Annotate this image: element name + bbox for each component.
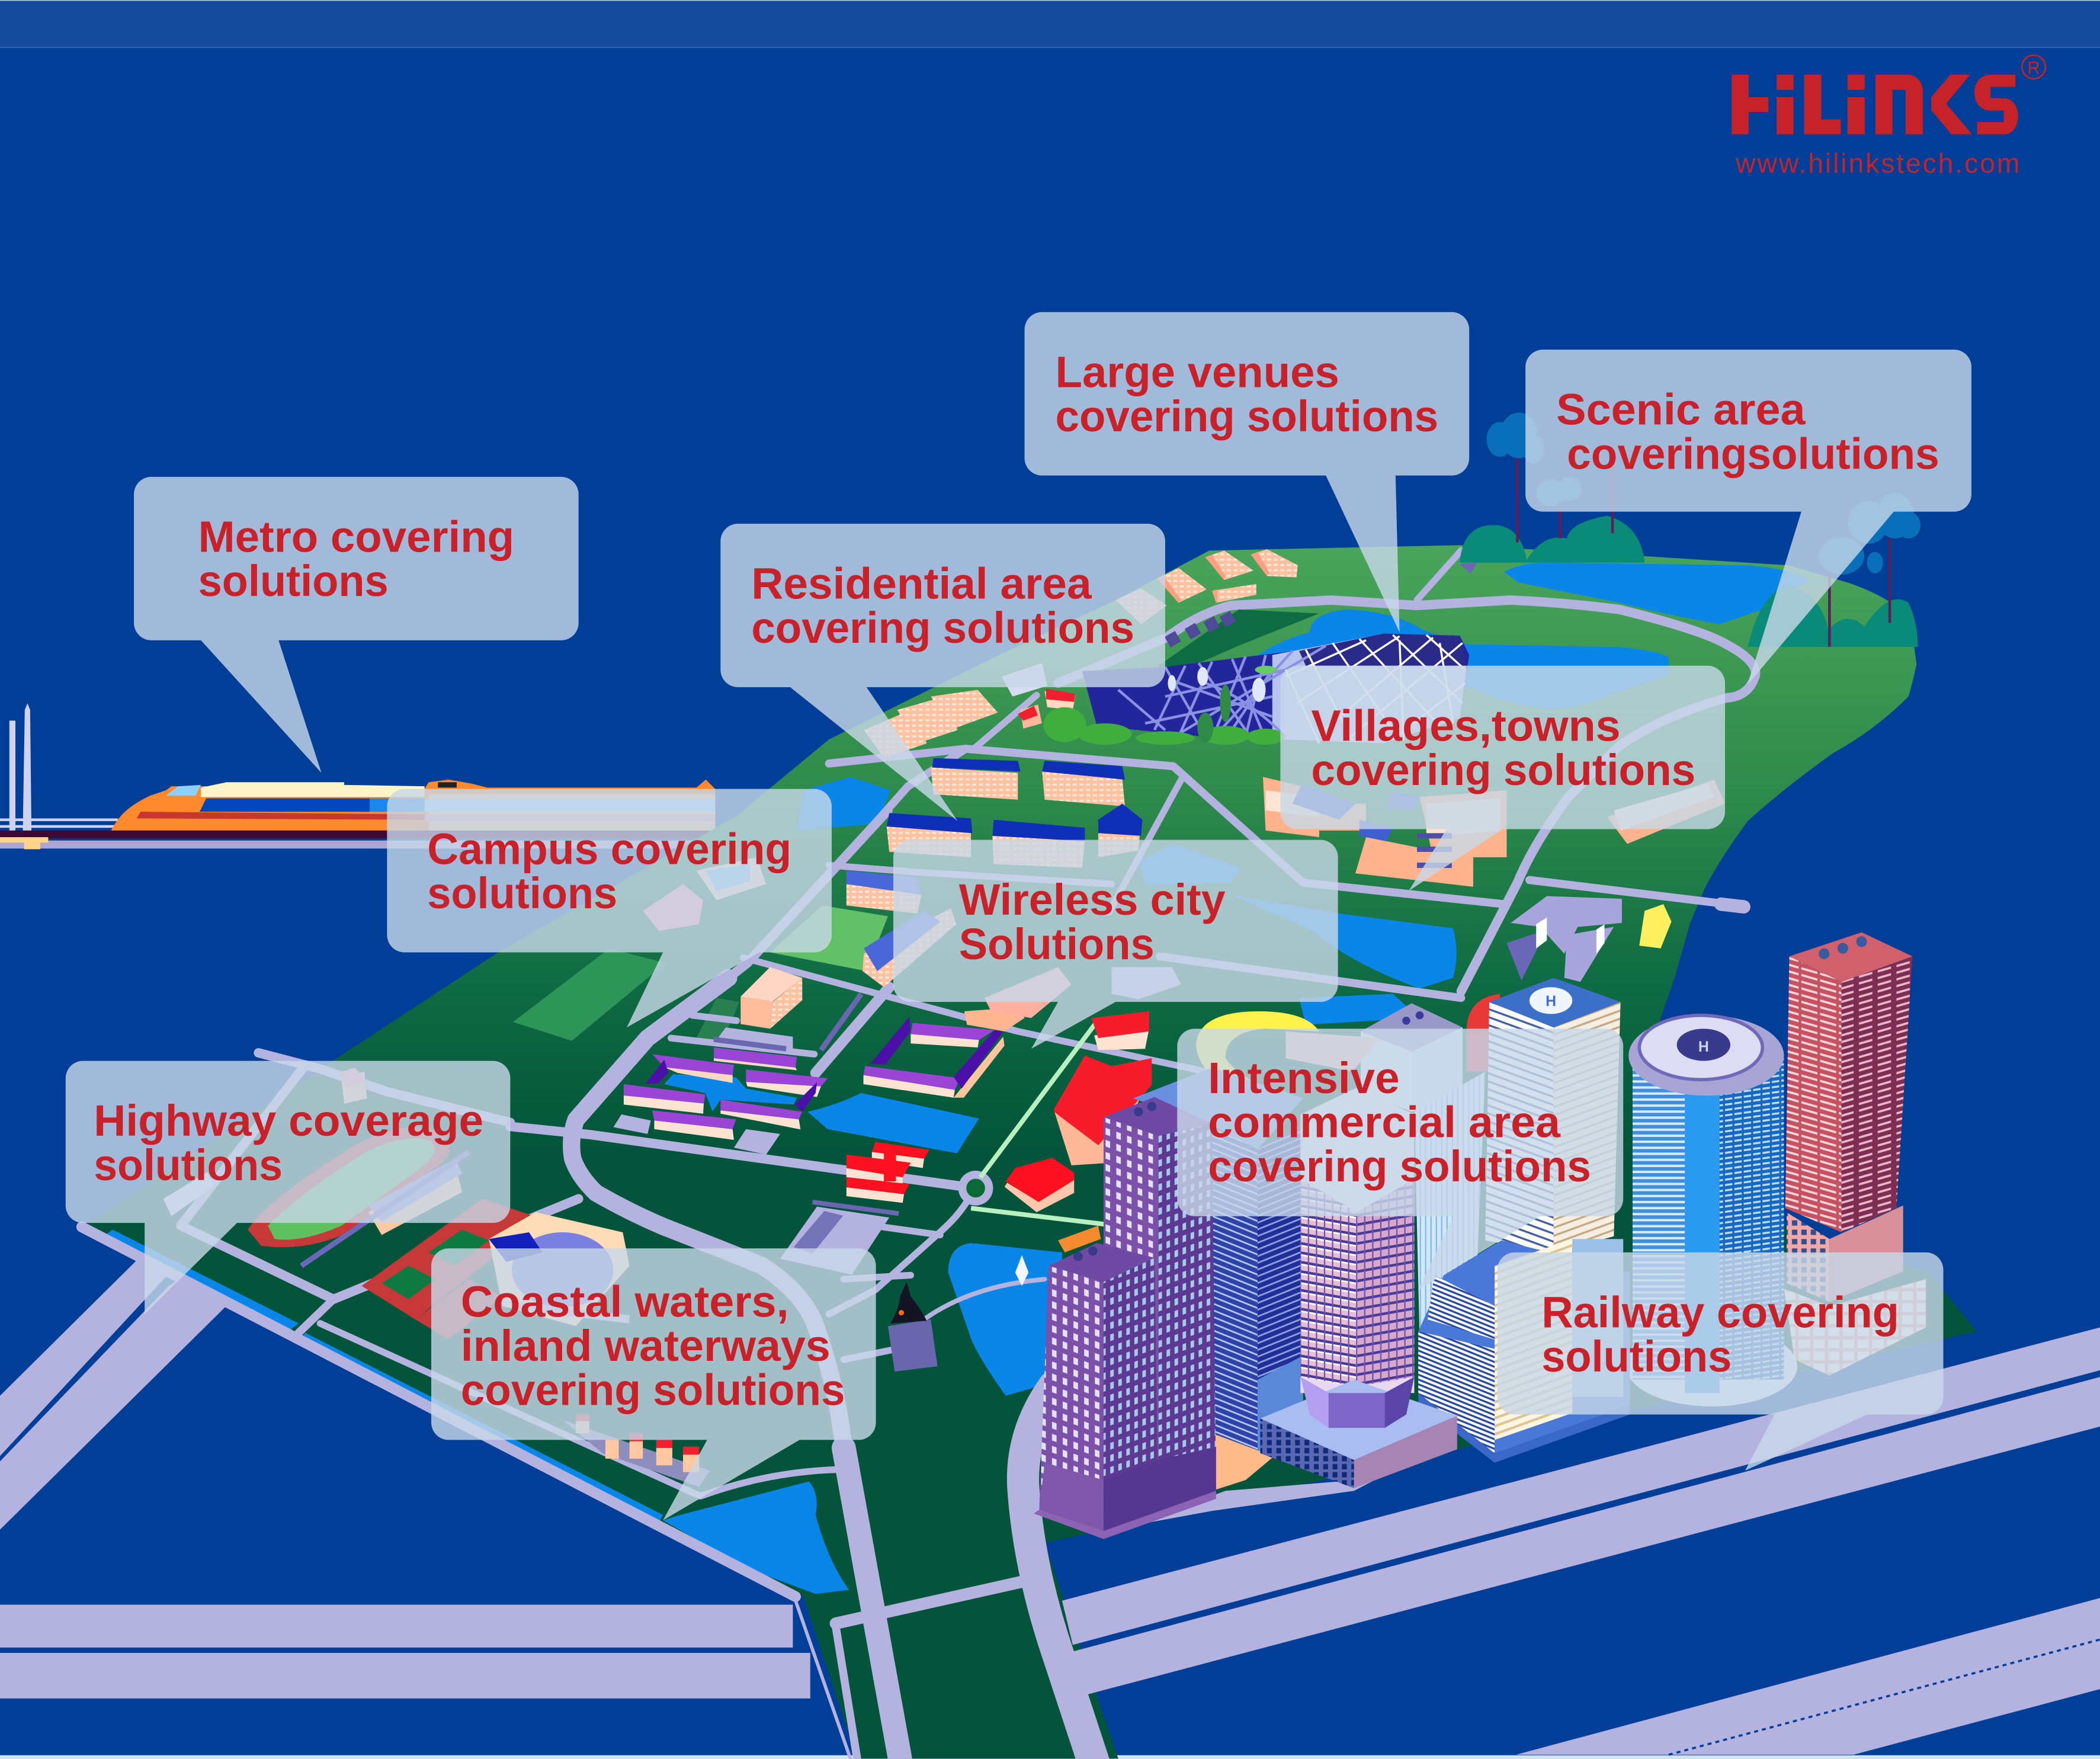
skyscrapers <box>1034 933 1926 1539</box>
text: intensive commercial: commercial area <box>1208 1097 1560 1146</box>
shadow slope <box>1159 610 1319 677</box>
red round ornament <box>1467 994 1500 1072</box>
highway left <box>0 1257 230 1530</box>
text: metro: Metro covering <box>198 511 514 561</box>
main lower curve road <box>572 978 844 1448</box>
orange lobby <box>1212 1433 1285 1491</box>
top band <box>0 0 2100 48</box>
dorm B6 <box>652 1054 734 1083</box>
flame tower <box>888 1282 938 1372</box>
text: highway: Highway coverage <box>94 1095 483 1145</box>
blue lower block <box>1418 1239 1630 1463</box>
logo wordmark HiLinks <box>1732 75 2018 134</box>
dorm B2 <box>652 1110 736 1140</box>
red buildings <box>847 1011 1152 1212</box>
tower E white <box>1485 978 1621 1252</box>
text: railway: solutions <box>1541 1331 1732 1381</box>
slim grey building <box>821 994 861 1050</box>
text: residential area: covering solutions <box>751 603 1134 652</box>
blue cylinder tower <box>1626 1015 1797 1406</box>
ring road <box>1058 600 1756 991</box>
tree crowns <box>1487 412 1921 575</box>
tower E white: H <box>1546 993 1556 1010</box>
logo <box>1732 55 2046 179</box>
text: railway <box>1541 1287 1899 1381</box>
highway bottom <box>0 1605 810 1699</box>
text: highway: solutions <box>94 1140 283 1190</box>
text: wireless city: Solutions <box>959 919 1155 969</box>
upper grid roads <box>829 749 1504 904</box>
big red hall <box>1054 1056 1152 1165</box>
text: coastal waters: covering solutions <box>461 1365 845 1415</box>
poles <box>1518 442 1890 647</box>
tower red <box>1784 933 1926 1376</box>
text: intensive commercial: Intensive <box>1208 1053 1400 1103</box>
train and track <box>0 703 852 849</box>
text: campus: Campus covering <box>427 824 791 873</box>
small houses <box>163 1068 367 1216</box>
trees top <box>1460 412 1921 647</box>
text: scenic area <box>1556 385 1939 478</box>
text: intensive commercial: covering solutions <box>1208 1141 1591 1191</box>
callout: metro <box>134 477 579 773</box>
text: metro: solutions <box>198 556 389 605</box>
train front car <box>111 782 425 831</box>
dorm B4 <box>746 1069 828 1097</box>
callout: wireless city <box>893 840 1338 1049</box>
peach block <box>740 967 802 1029</box>
orange roof tag <box>1058 1226 1101 1252</box>
dorm connectors <box>646 1059 817 1112</box>
text: scenic area: Scenic area <box>1556 385 1806 434</box>
text: railway: Railway covering <box>1541 1287 1899 1337</box>
rail track <box>0 831 852 849</box>
text: villages and towns: Villages,towns <box>1311 700 1621 750</box>
dorm B5 <box>714 1047 797 1070</box>
text: residential area: Residential area <box>751 559 1092 608</box>
text: wireless city: Wireless city <box>959 874 1226 924</box>
road network <box>82 550 1756 1759</box>
courtyard building <box>864 1017 1005 1098</box>
road pads <box>613 1027 793 1155</box>
tower D lilac <box>1260 1088 1457 1488</box>
text: residential area <box>751 559 1134 652</box>
registered mark <box>2022 55 2046 79</box>
blue-roof buildings <box>847 758 1142 987</box>
callout: scenic area <box>1525 350 1971 684</box>
small lilac kiosk <box>1460 563 1477 573</box>
yellow ring plaza <box>1196 1011 1380 1092</box>
callout: residential area <box>720 524 1165 821</box>
text: villages and towns: covering solutions <box>1311 745 1695 794</box>
gray cubes <box>1165 611 1236 648</box>
train second car <box>425 780 715 831</box>
bird's nest stadium <box>1043 633 1469 745</box>
tower middle light <box>1414 1072 1485 1340</box>
bridge pylons <box>0 703 118 833</box>
bottom lower roads <box>796 1601 851 1759</box>
dorm B1 <box>624 1084 706 1114</box>
lilac pad under towers <box>1131 1460 1413 1526</box>
tower A purple <box>1034 1243 1216 1539</box>
sports area roads <box>258 1053 510 1123</box>
stadium and sports area <box>163 857 1181 1487</box>
tennis courts <box>361 1199 543 1340</box>
text: campus <box>427 824 791 918</box>
campus land <box>83 545 1977 1759</box>
text: coastal waters <box>461 1276 845 1415</box>
callout: railway <box>1498 1252 1943 1470</box>
blue cylinder tower: H <box>1698 1039 1709 1055</box>
website url: www.hilinkstech.com <box>1735 148 2019 179</box>
lower residential strip <box>864 690 998 758</box>
H buildings <box>847 1142 929 1203</box>
dorm B3 <box>720 1100 802 1129</box>
gray seven building and yellow block <box>1506 896 1672 982</box>
grandstand <box>302 1152 469 1266</box>
villages blocks <box>1263 777 1725 887</box>
tower B purple <box>1104 1097 1216 1531</box>
roundabout <box>958 1171 993 1206</box>
text: scenic area: coveringsolutions <box>1567 428 1939 478</box>
text: large venues <box>1056 347 1438 441</box>
text: metro <box>198 511 514 605</box>
text: wireless city <box>959 874 1226 969</box>
plaza <box>780 1202 899 1274</box>
callout: large venues <box>1025 312 1469 632</box>
callout: highway <box>66 1061 510 1314</box>
callout: villages and towns <box>1280 666 1725 890</box>
podium block <box>1260 1380 1457 1488</box>
tower C blue <box>1133 1068 1303 1453</box>
gray small tower <box>1361 1003 1463 1112</box>
text: coastal waters: inland waterways <box>461 1321 831 1370</box>
block clusters <box>1115 549 1298 624</box>
text: highway <box>94 1095 483 1190</box>
teal hills <box>1460 515 1918 647</box>
callout: campus <box>387 789 832 1027</box>
registered mark: R <box>2027 58 2040 78</box>
railway lanes <box>1062 1328 2100 1755</box>
callout: intensive commercial <box>1177 1029 1623 1290</box>
running track <box>248 1127 450 1247</box>
pale avenue <box>971 1023 1105 1224</box>
coast road <box>82 1227 796 1597</box>
dock buildings <box>563 1414 710 1487</box>
red top block <box>1092 1011 1149 1050</box>
text: villages and towns <box>1311 700 1695 794</box>
text: coastal waters: Coastal waters, <box>461 1276 789 1326</box>
text: large venues: covering solutions <box>1056 391 1438 441</box>
text: large venues: Large venues <box>1056 347 1339 396</box>
pool <box>664 1074 797 1111</box>
ponds <box>102 563 1809 1594</box>
red house <box>1005 1158 1074 1212</box>
sail sculpture <box>1015 1255 1028 1286</box>
round square building <box>1111 967 1181 999</box>
gym hall <box>489 1212 630 1326</box>
campus purple buildings <box>624 967 1025 1140</box>
callout: coastal waters <box>431 1248 876 1520</box>
trees <box>1043 684 1284 745</box>
residential blocks top <box>864 549 1319 758</box>
text: campus: solutions <box>427 868 617 918</box>
text: intensive commercial <box>1208 1053 1591 1191</box>
fields <box>513 905 888 1042</box>
